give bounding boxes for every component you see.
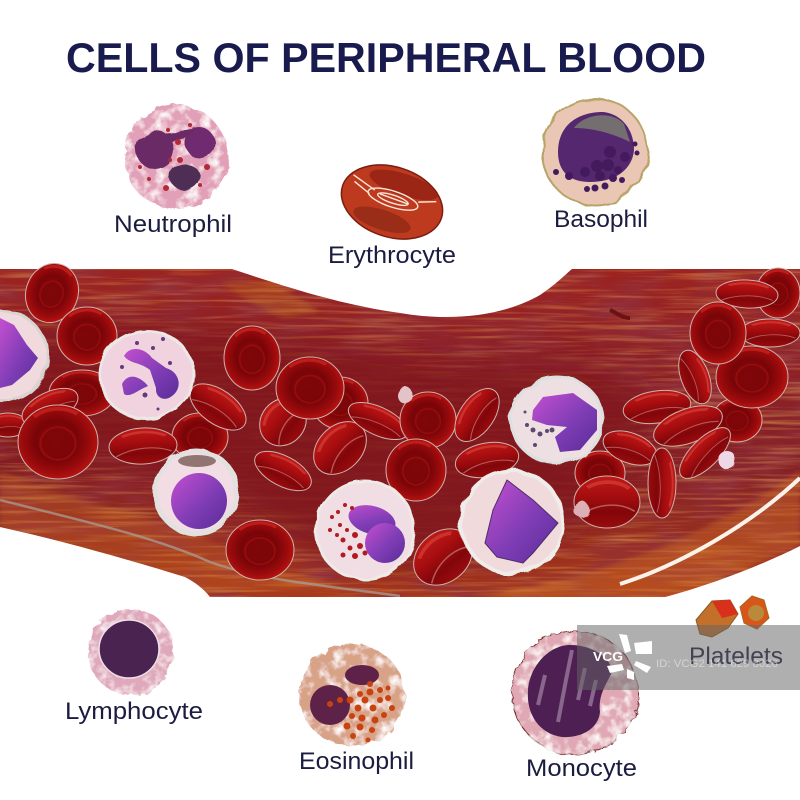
label: platelets: Platelets xyxy=(689,643,783,670)
neutrophil nucleus lobes xyxy=(136,128,215,190)
lymphocyte cap xyxy=(178,455,216,467)
basophil nucleus pale cap xyxy=(574,115,630,142)
vessel wall texture xyxy=(0,269,800,600)
monocyte cell body xyxy=(512,631,638,755)
white cell in vessel: neutrophil xyxy=(100,331,194,419)
monocyte nucleus in vessel xyxy=(485,480,558,563)
watermark band xyxy=(577,625,800,690)
eosinophil nucleus xyxy=(345,500,405,563)
left cell nucleus xyxy=(0,318,38,388)
basophil nucleus xyxy=(558,112,634,182)
neutrophil granules in vessel xyxy=(120,337,172,410)
watermark id: ID: VCG2 141 629 8026 xyxy=(656,658,778,670)
panel: erythrocyte diagram xyxy=(332,153,452,251)
monocyte nucleus highlight xyxy=(538,650,596,722)
eosinophil granules xyxy=(328,503,368,559)
neutrophil cell body xyxy=(124,105,228,209)
platelet right xyxy=(740,596,769,629)
white cell in vessel: eosinophil xyxy=(316,481,414,579)
platelet left xyxy=(696,600,738,637)
label: lymphocyte: Lymphocyte xyxy=(65,698,203,725)
label: monocyte: Monocyte xyxy=(526,755,637,782)
watermark logo xyxy=(607,634,652,680)
panel: lymphocyte diagram xyxy=(88,609,174,695)
erythrocyte body xyxy=(332,153,452,251)
title: CELLS OF PERIPHERAL BLOOD xyxy=(66,34,706,81)
platelets in vessel xyxy=(398,388,736,517)
white cell in vessel: lymphocyte xyxy=(155,451,237,533)
red blood cells: front layer xyxy=(16,256,788,597)
label: erythrocyte: Erythrocyte xyxy=(328,242,456,269)
neutrophil nucleus in vessel xyxy=(122,349,179,399)
lymphocyte nucleus xyxy=(171,473,227,529)
panel: blood vessel cross-section xyxy=(0,269,800,600)
basophil cell body xyxy=(542,99,648,205)
panel: neutrophil diagram xyxy=(124,105,228,209)
label: eosinophil: Eosinophil xyxy=(299,748,414,775)
erythrocyte highlight xyxy=(348,175,436,220)
lymphocyte cell body xyxy=(88,609,174,695)
erythrocyte dimple xyxy=(350,201,414,239)
platelet left shading xyxy=(712,600,738,618)
eosinophil cell body xyxy=(299,644,405,746)
eosinophil granules xyxy=(327,681,395,742)
red blood cells: back layer xyxy=(0,268,800,495)
panel: eosinophil diagram xyxy=(299,644,405,746)
monocyte nucleus xyxy=(528,645,612,737)
watermark brand: VCG xyxy=(593,649,623,664)
panel: basophil diagram xyxy=(542,99,648,205)
white cell in vessel: left monocyte xyxy=(0,311,47,401)
platelet right tan centre xyxy=(748,605,764,621)
neutrophil granules xyxy=(138,123,210,191)
erythrocyte shading xyxy=(366,163,442,206)
white cell in vessel: monocyte xyxy=(461,471,563,573)
basophil granules xyxy=(553,142,640,192)
label: neutrophil: Neutrophil xyxy=(114,211,232,238)
vessel wall xyxy=(0,269,800,597)
basophil granules in vessel xyxy=(524,410,554,447)
panel: platelets diagram xyxy=(696,596,769,637)
panel: monocyte diagram xyxy=(512,631,638,755)
white cell in vessel: basophil xyxy=(511,377,603,463)
basophil nucleus in vessel xyxy=(532,393,597,452)
eosinophil nucleus lobes xyxy=(310,665,379,725)
label: basophil: Basophil xyxy=(554,206,648,233)
lymphocyte nucleus xyxy=(99,620,159,678)
